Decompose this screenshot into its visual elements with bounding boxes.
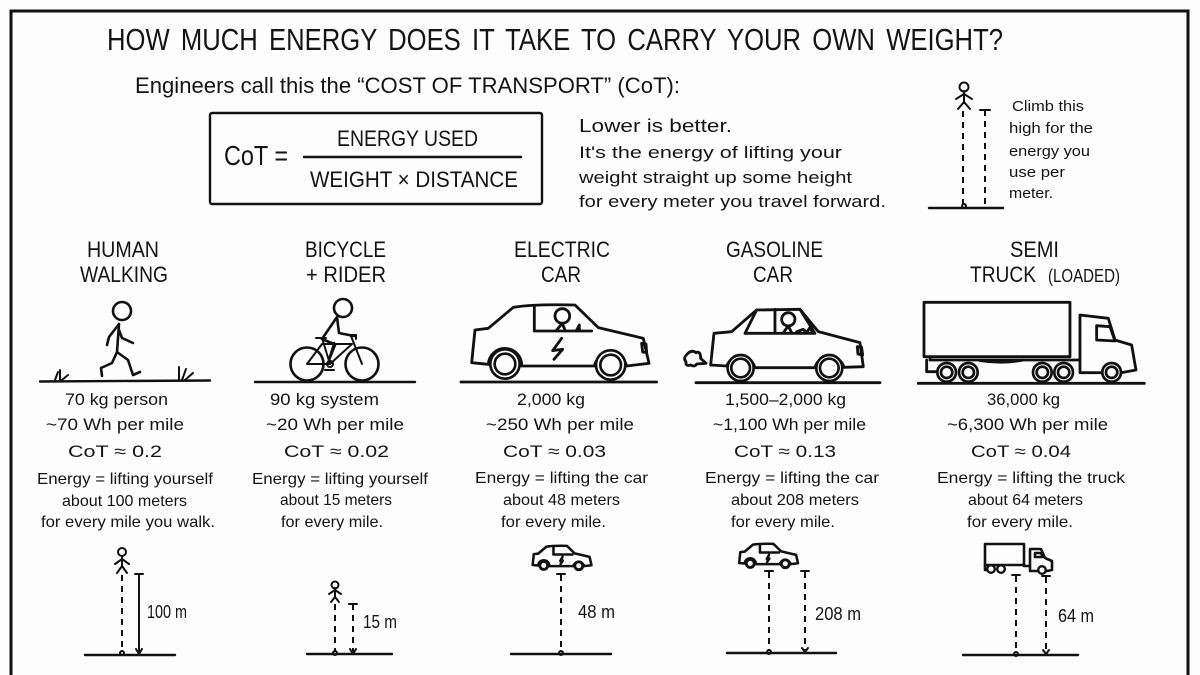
heading: gasoline car: GASOLINE — [726, 237, 823, 262]
panel: human walking — [37, 237, 215, 655]
height diagram: 208 m — [727, 544, 861, 654]
stats: semi truck — [937, 390, 1126, 531]
height diagram: 48 m — [511, 546, 615, 655]
formula box: CoT = — [224, 140, 288, 171]
panel: semi truck — [918, 237, 1144, 656]
climb height diagram: energy you — [1009, 143, 1090, 160]
stats: bicycle + rider: ~20 Wh per mile — [266, 415, 404, 434]
heading: human walking: WALKING — [80, 262, 168, 287]
formula box: WEIGHT × DISTANCE — [310, 167, 518, 192]
climb height diagram: Climb this — [1012, 98, 1084, 115]
stats: gasoline car: for every mile. — [731, 514, 835, 531]
stats: electric car: Energy = lifting the car — [475, 470, 649, 487]
stats: gasoline car: CoT ≈ 0.13 — [734, 442, 836, 461]
heading: human walking — [80, 237, 168, 287]
stats: human walking: Energy = lifting yourself — [37, 471, 214, 488]
height diagram: 208 m: 208 m — [815, 604, 861, 624]
explanation text — [578, 116, 886, 211]
heading: electric car — [514, 237, 610, 287]
formula box: ENERGY USED — [337, 126, 478, 151]
heading: semi truck: SEMI — [1010, 237, 1059, 262]
height diagram: 48 m: 48 m — [578, 602, 615, 622]
height diagram: 100 m: 100 m — [147, 602, 187, 622]
explanation text: It's the energy of lifting your — [579, 143, 842, 162]
icon: bicycle and rider — [255, 299, 415, 382]
height diagram: 15 m — [307, 582, 397, 655]
height diagram: 15 m: 15 m — [363, 612, 397, 632]
stats: electric car: about 48 meters — [503, 492, 620, 509]
stats: gasoline car — [705, 390, 880, 531]
stats: human walking: 70 kg person — [65, 390, 168, 409]
height diagram: 100 m — [85, 548, 187, 655]
stats: human walking — [37, 390, 215, 531]
icon: small truck — [985, 544, 1052, 574]
heading: gasoline car: CAR — [753, 262, 793, 287]
icon: semi truck — [918, 302, 1144, 383]
stats: human walking: for every mile you walk. — [41, 514, 215, 531]
heading: gasoline car — [726, 237, 823, 287]
heading: human walking: HUMAN — [87, 237, 159, 262]
stats: semi truck: 36,000 kg — [987, 390, 1060, 409]
stats: electric car: ~250 Wh per mile — [486, 415, 634, 434]
formula box — [210, 113, 542, 204]
height diagram: 64 m: 64 m — [1058, 606, 1094, 626]
stats: bicycle + rider — [252, 390, 429, 531]
stats: human walking: ~70 Wh per mile — [46, 415, 184, 434]
stats: semi truck: about 64 meters — [968, 492, 1083, 509]
stats: semi truck: CoT ≈ 0.04 — [971, 442, 1071, 461]
icon: walking person — [40, 302, 210, 382]
stats: gasoline car: ~1,100 Wh per mile — [713, 415, 866, 434]
heading: semi truck — [970, 237, 1120, 287]
climb height diagram: use per — [1009, 164, 1065, 181]
explanation text: for every meter you travel forward. — [579, 192, 886, 211]
stats: electric car — [475, 390, 649, 531]
stats: bicycle + rider: CoT ≈ 0.02 — [284, 442, 389, 461]
height diagram: 64 m — [963, 544, 1094, 656]
stats: bicycle + rider: Energy = lifting yourself — [252, 471, 429, 488]
stats: human walking: about 100 meters — [62, 493, 187, 510]
stats: semi truck: for every mile. — [967, 514, 1073, 531]
stats: bicycle + rider: about 15 meters — [280, 492, 392, 509]
stats: gasoline car: Energy = lifting the car — [705, 470, 880, 487]
stats: semi truck: Energy = lifting the truck — [937, 470, 1126, 487]
climb height diagram: high for the — [1009, 120, 1093, 137]
subtitle: Engineers call this the “COST OF TRANSPORT” (CoT): — [135, 73, 680, 98]
climb height diagram: meter. — [1009, 185, 1053, 202]
heading: semi truck: TRUCK — [970, 262, 1036, 287]
stats: gasoline car: about 208 meters — [731, 492, 859, 509]
explanation text: weight straight up some height — [578, 168, 852, 187]
heading: bicycle + rider: BICYCLE — [305, 237, 386, 262]
stats: bicycle + rider: for every mile. — [281, 514, 383, 531]
icon: electric car — [461, 305, 657, 382]
stats: human walking: CoT ≈ 0.2 — [68, 442, 162, 461]
stats: gasoline car: 1,500–2,000 kg — [725, 390, 846, 409]
title: HOW MUCH ENERGY DOES IT TAKE TO CARRY YOUR OWN WEIGHT? — [107, 22, 1003, 57]
stats: electric car: for every mile. — [501, 514, 606, 531]
climb height diagram — [929, 82, 1093, 208]
stats: electric car: 2,000 kg — [517, 390, 585, 409]
heading: semi truck: (LOADED) — [1048, 266, 1120, 286]
heading: bicycle + rider — [305, 237, 386, 287]
stats: electric car: CoT ≈ 0.03 — [503, 442, 606, 461]
icon: small gasoline car — [739, 544, 798, 568]
heading: electric car: ELECTRIC — [514, 237, 610, 262]
stats: semi truck: ~6,300 Wh per mile — [947, 415, 1108, 434]
panel: electric car — [461, 237, 657, 655]
stats: bicycle + rider: 90 kg system — [270, 390, 379, 409]
icon: gasoline car with exhaust — [685, 309, 880, 383]
icon: small electric car — [533, 546, 591, 570]
explanation text: Lower is better. — [579, 116, 732, 136]
panel: gasoline car — [685, 237, 880, 654]
heading: bicycle + rider: + RIDER — [306, 262, 386, 287]
heading: electric car: CAR — [541, 262, 581, 287]
panel: bicycle + rider — [252, 237, 429, 655]
